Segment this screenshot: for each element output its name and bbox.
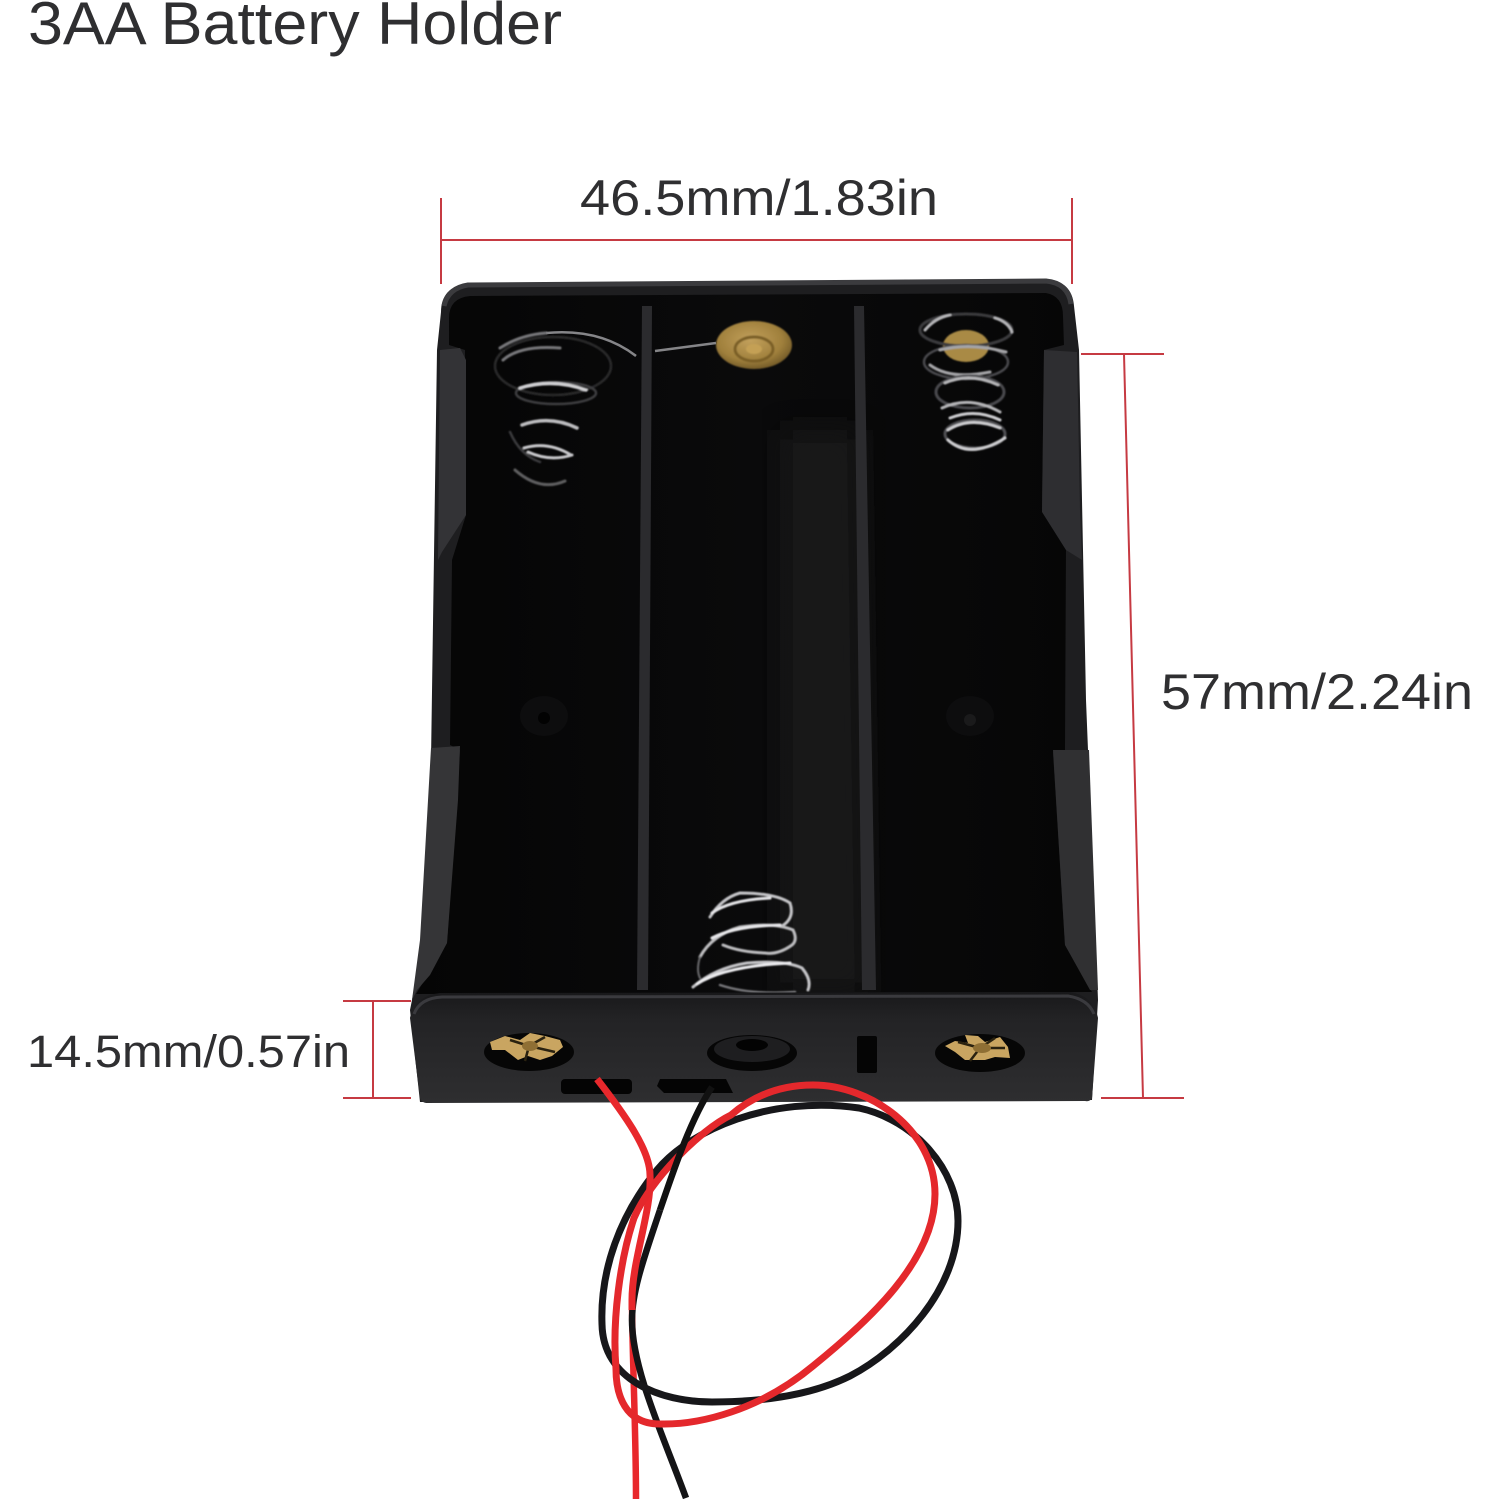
holder outer shell — [410, 279, 1098, 1102]
right screw — [935, 1034, 1025, 1072]
width label: 46.5mm/1.83in — [580, 170, 938, 226]
middle chamber shading — [780, 430, 868, 992]
connecting wire — [546, 332, 716, 356]
depth dimension — [343, 1001, 411, 1098]
brass contact — [716, 321, 792, 369]
red tail — [632, 1300, 636, 1499]
depth label: 14.5mm/0.57in — [27, 1026, 350, 1077]
top rim highlight — [444, 281, 1071, 306]
vertical slot — [857, 1036, 877, 1073]
right side wall lower — [1053, 750, 1098, 990]
wires — [597, 1079, 958, 1499]
right side wall upper — [1042, 350, 1082, 560]
bottom spring — [693, 893, 809, 993]
floor peg right — [946, 696, 994, 736]
width dimension — [441, 198, 1072, 284]
battery holder body — [410, 279, 1098, 1103]
black lead — [660, 1087, 712, 1210]
left side wall lower — [412, 746, 460, 1000]
front face upper edge — [414, 996, 1094, 1014]
centre hole — [707, 1035, 797, 1071]
height label: 57mm/2.24in — [1161, 664, 1473, 720]
divider right — [854, 306, 876, 990]
wire slot left — [561, 1079, 632, 1094]
left screw — [484, 1033, 574, 1071]
left spring — [495, 333, 611, 485]
black loop — [602, 1105, 958, 1402]
divider left — [637, 306, 652, 990]
front face — [410, 992, 1098, 1103]
right spring with brass contact — [920, 314, 1012, 450]
red loop — [615, 1085, 935, 1424]
left side wall upper — [438, 348, 466, 560]
wire slot right — [657, 1079, 733, 1093]
black tail — [632, 1210, 686, 1498]
height dimension — [1081, 354, 1184, 1098]
red lead — [597, 1079, 650, 1310]
battery well interior — [416, 293, 1092, 994]
floor peg left — [520, 696, 568, 736]
